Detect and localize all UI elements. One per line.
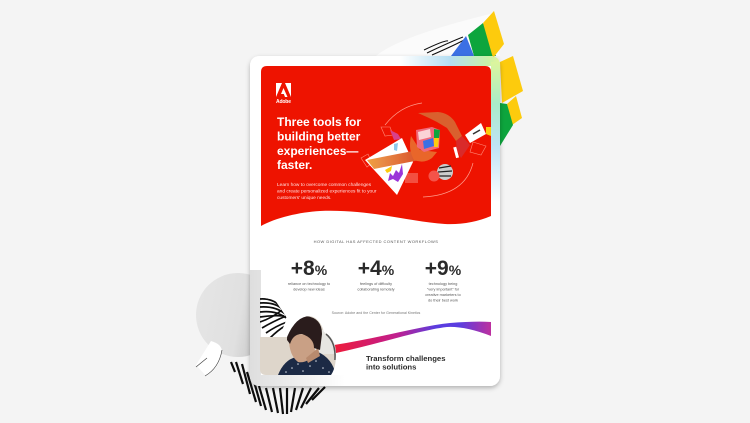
stat: +4%: feelings of difficulty [360, 282, 392, 286]
blue tab [451, 36, 474, 56]
hand lower [410, 136, 437, 162]
tablet chart [388, 164, 403, 182]
stat: +4%: collaborating remotely [357, 288, 395, 292]
green tab lower [500, 103, 513, 146]
hand upper and arm [418, 112, 462, 141]
card body [250, 56, 500, 386]
card [250, 56, 500, 386]
pale box [405, 173, 418, 183]
source note: Source: Adobe and the Center for Generational Kinetics [332, 311, 421, 315]
cube [416, 127, 440, 152]
zebra striped swirl [231, 362, 325, 414]
stat: +8%: develop new ideas [293, 288, 325, 292]
title: faster. [277, 158, 312, 172]
tablet [365, 138, 413, 195]
white back sheet [376, 14, 500, 56]
title [277, 115, 361, 172]
photo: woman [260, 316, 337, 376]
photo background [260, 316, 337, 376]
stat: +9%: +9% [425, 257, 462, 280]
panel: red hero [261, 66, 491, 226]
yellow tab middle [500, 56, 523, 103]
description text: customers' unique needs. [277, 195, 332, 201]
stat: +4% [357, 257, 395, 292]
orbit ring [385, 103, 473, 197]
card shaded lower-left [250, 270, 345, 386]
description text: and create personalized experiences fit to your [277, 188, 377, 194]
stat: +8%: reliance on technology to [288, 282, 330, 286]
title: experiences— [277, 144, 358, 158]
closing headline [366, 354, 445, 372]
section heading: HOW DIGITAL HAS AFFECTED CONTENT WORKFLOWS [314, 239, 438, 244]
faint outlined shapes [361, 127, 486, 167]
forearm left [367, 151, 420, 169]
stat: +4%: +4% [358, 257, 395, 280]
sleeve [456, 136, 470, 158]
ribbon swoosh [334, 322, 491, 353]
shirt [278, 352, 336, 375]
faded ball shadow [428, 170, 440, 182]
yellow tab lower [507, 96, 522, 125]
icon: Adobe logo [276, 83, 291, 105]
pink accent near tablet [390, 130, 401, 140]
striped ball [437, 164, 453, 180]
stat: +9%: creative marketers to [425, 293, 461, 297]
stat: +8% [288, 257, 330, 292]
green tab [468, 23, 496, 56]
card glow edge top [250, 56, 500, 66]
yellow tab top [483, 11, 504, 58]
grey disc decoration [196, 273, 280, 376]
stat: +9%: do their best work [428, 298, 458, 302]
stat: +8%: +8% [291, 257, 328, 280]
title: building better [277, 130, 361, 144]
right edge shadow [326, 334, 335, 360]
title: Three tools for [277, 115, 361, 129]
stat: +9%: technology being [429, 282, 457, 286]
description text: Learn how to overcome common challenges [277, 182, 372, 188]
closing headline: Transform challenges [366, 354, 445, 363]
back sheet: colourful folder tabs [376, 11, 523, 146]
stat: +9% [425, 257, 462, 302]
stat: +9%: "very important" for [427, 288, 460, 292]
hair [287, 316, 322, 350]
face [289, 334, 315, 362]
description text [277, 182, 377, 201]
phone [465, 123, 486, 143]
icon: Adobe logo: Adobe [276, 99, 291, 105]
black squiggle lines [424, 37, 466, 55]
small white fork shape [196, 341, 222, 376]
closing headline: into solutions [366, 362, 416, 372]
illustration: hands, tablet and cube [361, 103, 491, 197]
zebra corner graphic [260, 299, 287, 338]
yellow tab on phone [486, 127, 491, 136]
card glow edge right [491, 62, 500, 202]
